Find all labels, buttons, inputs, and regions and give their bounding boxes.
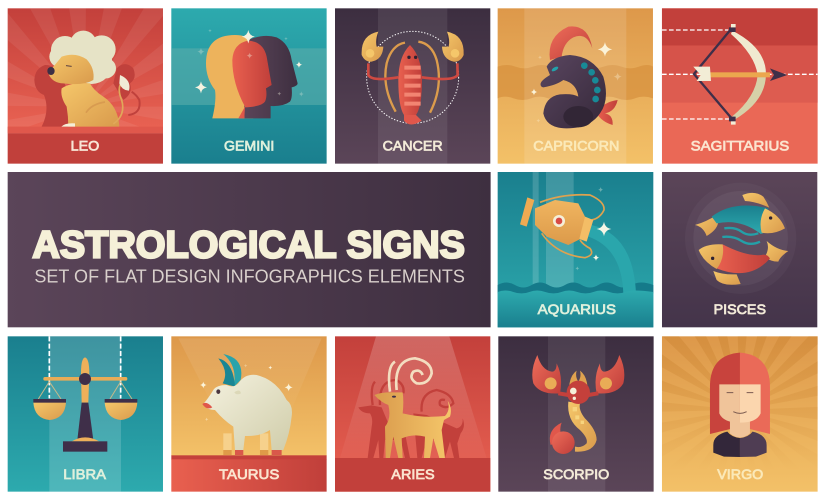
bottom fish tail [765,241,788,262]
creature dots [581,62,601,102]
shadow right goat [413,413,464,458]
aries eye [392,396,396,398]
jar handles [540,195,604,258]
jar body [535,200,587,245]
front horn [218,358,235,387]
leo shadow [34,64,135,127]
shadow tail [128,92,140,115]
body spots [570,388,577,400]
floor [171,459,327,492]
right claw spot [600,377,612,389]
bottom fish face [699,244,723,269]
lobster tail [404,115,422,124]
capricorn sparkles [531,42,622,123]
scale pillar [81,357,89,403]
left shirt [713,432,740,457]
panel: scorpio [498,336,654,492]
panel: libra [8,336,163,492]
lobster eyes [407,56,417,59]
haunch line [86,102,105,113]
cancer background [335,8,490,164]
scorpion horns [569,371,587,385]
right hair [740,353,770,434]
top fish fin [742,193,769,208]
body stripes [404,66,421,106]
taurus sparkles [200,364,293,421]
belly shade [563,106,593,127]
aquarius sparkles [575,187,611,270]
outer halo [685,183,796,294]
left claw [532,355,561,394]
libra background [8,336,163,492]
bow nocks [731,24,736,125]
virgo background [662,336,818,492]
water stream [588,225,636,293]
aries horns [389,358,432,392]
jar lip right [579,217,593,242]
fletching [693,67,711,81]
stinger crescent [550,423,563,445]
aries body [374,392,451,458]
scale base [63,441,107,452]
red head [232,41,272,118]
bow tips [729,27,736,121]
dark head [244,36,298,118]
back legs [223,433,268,450]
sagittarius band one [662,8,818,46]
libra center stripe [49,336,121,492]
eyes [727,391,753,394]
light cone [178,338,322,413]
leo background [8,8,163,133]
aquarius label: AQUARIUS [538,301,616,317]
left pan [33,402,66,420]
bow lower limb [732,75,766,120]
top fish eye [769,216,772,220]
panel: cancer [335,8,490,164]
right shirt [740,432,767,457]
floor edge [171,455,327,460]
claw arms [558,393,598,395]
capricorn water band [498,65,653,100]
panel: pisces [662,172,817,327]
creature eye [551,66,559,72]
left hair [710,353,740,434]
right claw [442,32,464,62]
taurus label: TAURUS [219,466,279,482]
gemini sparkles [195,29,304,97]
scorpio background [498,336,654,492]
scorpion tail [568,402,597,452]
back wave [498,282,653,293]
lion mane [49,31,116,84]
lion nose [47,67,55,75]
bull body [203,375,292,450]
right face [740,384,761,423]
lion tail [113,82,123,124]
inner halo [693,191,788,286]
left pan rim [33,399,66,403]
aquarius background [498,172,653,327]
panel: virgo [662,336,818,492]
base dome [72,437,99,441]
capricorn background [498,8,653,164]
leo rays [18,40,152,173]
water lines [722,228,760,244]
subheading: SET OF FLAT DESIGN INFOGRAPHICS ELEMENTS [34,265,465,286]
leo label: LEO [71,138,99,154]
antennae [385,42,439,113]
leo floor band [8,133,163,164]
top fish tail [695,215,718,236]
bowstring [694,28,732,118]
scale strings [38,382,132,399]
aries label: ARIES [391,466,435,482]
smile [733,412,747,413]
tail tuft [119,75,129,91]
panel: gemini [171,8,327,164]
pisces label: PISCES [714,301,766,317]
heading: ASTROLOGICAL SIGNS [32,224,465,266]
left face [719,384,740,423]
paws [61,123,75,127]
scorpio center stripe [548,336,605,492]
shadow horns [372,380,453,412]
jar ornament center [556,218,562,224]
panel: aquarius [498,172,653,327]
panel: leo [8,8,163,173]
light beams [533,172,574,292]
bottom fish body [717,244,770,273]
gemini middle band [171,48,327,105]
arms [368,63,458,79]
top fish body [712,206,768,234]
bull ear [234,391,241,394]
lion body [61,83,119,127]
scorpio label: SCORPIO [543,466,609,482]
front hooves [235,450,282,455]
back hooves [223,450,268,455]
scorpion stinger [552,431,575,454]
libra label: LIBRA [63,466,107,482]
aries background [335,336,490,492]
left claw spot [545,377,557,389]
lobster body [398,45,422,115]
taurus background [171,336,327,456]
gemini background [171,8,327,164]
sea creature body [541,55,606,128]
back horn [223,354,241,387]
gold head [206,35,253,118]
band three [662,74,818,103]
capricorn center stripe [524,8,626,164]
bottom fish eye [711,257,714,260]
right pan rim [105,399,137,403]
right claw [596,355,624,394]
sagittarius background [662,8,818,164]
cancer center stripe [378,8,447,164]
dashed guides [662,30,818,119]
light beam [340,336,487,458]
panel: capricorn [498,8,653,164]
bottom fish fin [713,271,741,285]
virgo label: VIRGO [717,466,763,482]
scale beam [43,377,127,381]
dashed lines [49,336,121,398]
band two [662,46,818,74]
lion eye [66,64,72,68]
dashed circle [367,31,459,123]
left claw joint [366,49,374,58]
shadow left goat [358,405,410,458]
title background [8,172,491,327]
sea creature crest [550,26,592,60]
jar ornament [553,215,565,227]
panel: taurus [171,336,327,492]
bull nose [202,403,212,408]
bull eye [216,389,220,394]
aries floor [335,458,490,492]
pisces background [662,172,817,327]
sagittarius label: SAGITTARIUS [691,138,789,154]
tail marks [573,407,584,424]
jar lip left [520,197,534,227]
bow upper limb [731,31,766,75]
pivot [79,373,91,385]
panel: sagittarius [662,8,818,164]
gemini label: GEMINI [224,138,274,154]
right pan [105,402,137,420]
left claw [362,32,383,62]
top fish face [761,208,785,233]
scale stand [77,403,93,440]
capricorn label: CAPRICORN [533,138,619,154]
water surface [498,290,653,327]
arrow shaft [707,72,770,77]
arrow head [770,68,787,81]
right claw joint [451,49,459,58]
neck [730,420,750,437]
panel: aries [335,336,490,492]
tail fin [597,100,618,125]
cancer label: CANCER [383,138,443,154]
virgo rays [662,336,818,406]
panel: title [8,172,491,327]
lion head [49,55,94,84]
leo floor strip [8,127,163,133]
scorpion body [567,381,590,404]
